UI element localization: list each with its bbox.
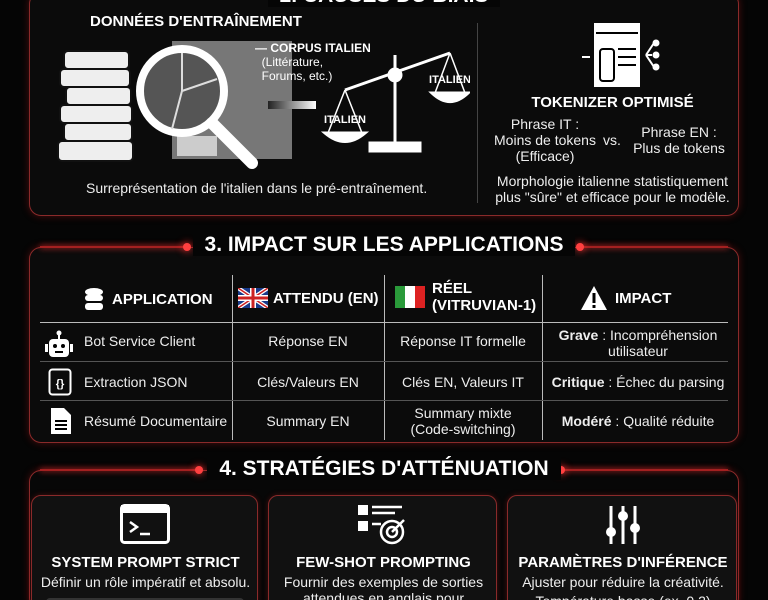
text: token comparison: Phrase IT : xyxy=(511,116,579,132)
panel: impact sur les applications xyxy=(29,247,739,443)
icon: scale: ITALIEN xyxy=(429,74,470,86)
header: application xyxy=(85,288,213,310)
icon: books and magnifier xyxy=(59,41,292,169)
icon: scale xyxy=(321,52,470,152)
heading: donnees d'entrainement: DONNÉES D'ENTRAÎNEMENT xyxy=(90,13,302,30)
row: bot: Grave : Incompréhension utilisateur xyxy=(559,327,717,359)
header: reel: RÉEL xyxy=(432,280,472,297)
card: system prompt: SYSTEM PROMPT STRICT xyxy=(51,554,240,571)
text: corpus italien: Forums, etc.) xyxy=(262,69,332,83)
icon: terminal xyxy=(120,504,170,544)
card: system prompt xyxy=(31,495,258,600)
row: resume xyxy=(51,405,714,437)
text: token comparison: Plus de tokens xyxy=(633,140,725,156)
row: json: Clés/Valeurs EN xyxy=(257,374,359,390)
row: json: Clés EN, Valeurs IT xyxy=(402,374,524,390)
heading: impact: 3. IMPACT SUR LES APPLICATIONS xyxy=(205,233,563,256)
icon: target list xyxy=(358,505,405,544)
card: few-shot xyxy=(268,495,497,600)
text: corpus italien xyxy=(255,41,371,83)
text: token comparison: Phrase EN : xyxy=(641,124,717,140)
row: resume: Summary EN xyxy=(266,413,350,429)
text: token comparison xyxy=(494,116,725,164)
row: resume: Summary mixte xyxy=(414,405,512,421)
card: parametres: PARAMÈTRES D'INFÉRENCE xyxy=(518,554,728,571)
row: json: Critique : Échec du parsing xyxy=(552,374,724,390)
text: token comparison: (Efficace) xyxy=(516,148,574,164)
row: bot: Réponse IT formelle xyxy=(400,333,526,349)
header: reel xyxy=(395,280,536,314)
icon: tokenizer xyxy=(582,23,660,87)
header: application: APPLICATION xyxy=(112,290,213,308)
row: resume: Résumé Documentaire xyxy=(84,413,227,429)
text: token comparison: Moins de tokens xyxy=(494,132,596,148)
text: token comparison: vs. xyxy=(603,132,621,148)
header: impact xyxy=(581,286,672,310)
text: corpus italien: (Littérature, xyxy=(262,55,323,69)
panel: causes du biais xyxy=(29,0,739,216)
panel: strategies d'attenuation xyxy=(29,470,739,600)
row: json xyxy=(48,368,724,396)
row: bot: Réponse EN xyxy=(268,333,348,349)
header: attendu xyxy=(238,288,379,308)
arrow xyxy=(268,101,316,109)
icon: scale: ITALIEN xyxy=(324,114,366,126)
header: attendu: ATTENDU (EN) xyxy=(273,290,379,306)
text: corpus italien: — CORPUS ITALIEN xyxy=(255,41,371,55)
card: system prompt: Définir un rôle impératif et absolu. xyxy=(41,574,250,590)
row: bot: Bot Service Client xyxy=(84,333,195,349)
text: morphologie: Morphologie italienne statistiquement plus "sûre" et efficace pour le modèle. xyxy=(495,173,730,205)
divider xyxy=(477,23,478,203)
card: parametres xyxy=(507,495,737,600)
card: few-shot: FEW-SHOT PROMPTING xyxy=(296,554,471,571)
card: parametres: Ajuster pour réduire la créativité. xyxy=(522,574,724,590)
row: json: {} xyxy=(56,378,65,390)
row: bot xyxy=(45,327,717,359)
heading: strategies: 4. STRATÉGIES D'ATTÉNUATION xyxy=(219,457,549,480)
table xyxy=(40,275,728,440)
header: reel: (VITRUVIAN-1) xyxy=(432,297,536,314)
icon: sliders xyxy=(606,506,640,544)
row: resume: Modéré : Qualité réduite xyxy=(562,413,714,429)
caption: Surreprésentation de l'italien dans le pré-entraînement. xyxy=(86,180,427,196)
row: resume: (Code-switching) xyxy=(410,421,516,437)
heading: tokenizer optimise: TOKENIZER OPTIMISÉ xyxy=(531,94,694,111)
header: impact: IMPACT xyxy=(615,290,671,306)
row: json: Extraction JSON xyxy=(84,374,187,390)
